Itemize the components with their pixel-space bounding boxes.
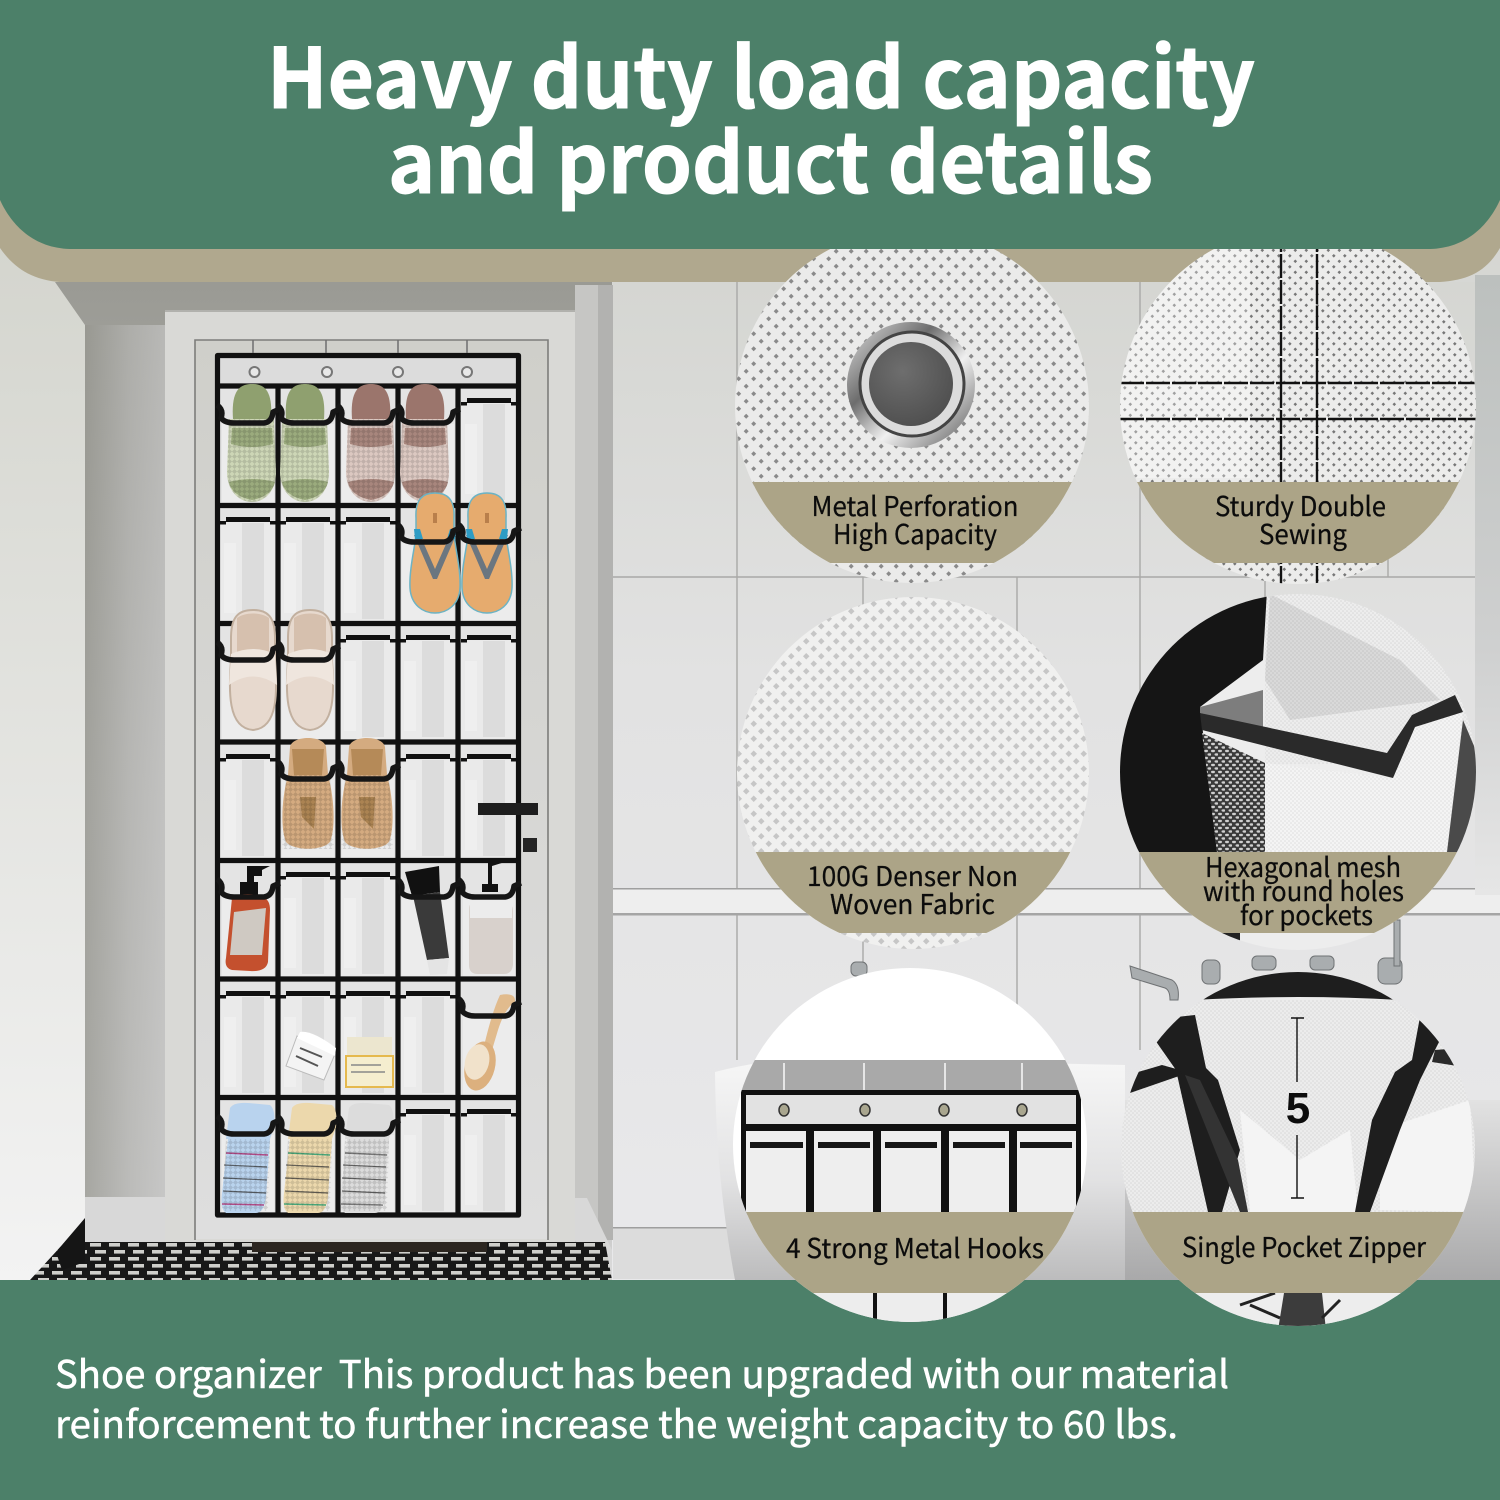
door handle and lock (478, 803, 538, 852)
wooden hair brush (459, 994, 515, 1094)
door with frame (165, 310, 575, 1242)
icon: metal eyelet (847, 322, 975, 448)
row 6 pockets (220, 981, 517, 1096)
green slippers (227, 384, 329, 502)
black top binding (1204, 972, 1394, 1000)
red pump bottle (226, 866, 270, 971)
inner mesh (1200, 690, 1263, 730)
row 7 pockets (220, 1099, 517, 1214)
dado rail (613, 888, 1500, 916)
yellow cream jar (346, 1037, 393, 1087)
mauve slippers (346, 384, 449, 502)
white pump jar (469, 862, 513, 974)
black cosmetic tube (405, 866, 449, 975)
stitch lines (1120, 228, 1480, 590)
row 5 pockets (220, 862, 517, 977)
pocket binding (1200, 695, 1463, 778)
caption band (1120, 1212, 1476, 1293)
row 3 pockets (220, 625, 517, 740)
row 4 pockets (220, 744, 517, 859)
faucet and taps (851, 920, 1402, 1000)
blue towel (222, 1103, 274, 1213)
title: and product details (388, 97, 1153, 217)
dimension marker (1286, 1018, 1310, 1198)
detail circle: non woven fabric (737, 597, 1089, 949)
baseboard right jamb (575, 1198, 612, 1280)
tile baseboard (613, 1227, 743, 1279)
tile wall (613, 282, 1500, 1280)
caption band: Woven Fabric (830, 883, 995, 922)
left straps (1155, 1015, 1240, 1212)
lower stand (1195, 1293, 1401, 1326)
detail circle: metal hooks (730, 966, 1090, 1327)
back wall (55, 282, 612, 1280)
caption band (1139, 852, 1457, 933)
detail circle: metal perforation (735, 229, 1089, 583)
caption band (735, 482, 1089, 563)
detail circle: pocket zipper (1120, 970, 1476, 1333)
title: Heavy duty load capacity (267, 12, 1255, 132)
shoe organizer (217, 340, 521, 1215)
header strip (219, 356, 518, 386)
dimension marker: 5 (1286, 1084, 1310, 1133)
top banner: green panel (0, 0, 1500, 249)
caption band (756, 852, 1070, 933)
bottom green panel (0, 1280, 1500, 1500)
frame and grid (218, 356, 518, 1215)
description text: reinforcement to further increase the weight capacity to 60 lbs. (55, 1394, 1178, 1449)
floor: black and white tile (30, 1218, 612, 1280)
detail circle: hexagonal mesh (1110, 590, 1480, 953)
hook wires (784, 1063, 1022, 1090)
caption band: Sturdy Double (1215, 485, 1386, 524)
caption band: Metal Perforation (812, 485, 1018, 524)
bath tub (715, 1057, 1125, 1280)
white center panel (1240, 1110, 1358, 1212)
yellow towel (284, 1103, 336, 1213)
woven sandals (282, 738, 393, 849)
right door jamb (575, 285, 613, 1240)
detail circle: double sewing (1120, 228, 1480, 590)
caption band: Hexagonal mesh (1205, 846, 1401, 885)
hook strings and eyelets (250, 340, 472, 377)
caption band: with round holes (1203, 870, 1404, 909)
grey towel (340, 1103, 394, 1213)
door recess shading (85, 325, 165, 1205)
baseboard left (85, 1197, 165, 1243)
lower white mesh (1266, 712, 1463, 764)
scene: bathroom background (0, 240, 1500, 1290)
caption band: 100G Denser Non (807, 855, 1018, 894)
organizer close-up (741, 1090, 1081, 1215)
left wall (0, 240, 85, 1280)
caption band: 4 Strong Metal Hooks (786, 1227, 1044, 1266)
elastic pocket bands (217, 405, 521, 1134)
title (267, 12, 1255, 217)
caption band: Single Pocket Zipper (1182, 1226, 1426, 1265)
top banner: tan band (0, 190, 1500, 282)
cork flip-flops (410, 493, 512, 613)
caption band (1120, 482, 1476, 563)
caption band: Sewing (1259, 513, 1347, 552)
caption band: for pockets (1240, 894, 1373, 933)
white cream jar (286, 1032, 336, 1080)
tile grid (613, 282, 1500, 1060)
door mat (252, 1234, 487, 1252)
caption band (730, 1212, 1090, 1293)
description text (55, 1344, 1229, 1449)
right strap (1447, 720, 1476, 852)
row 1 pockets (220, 388, 517, 503)
caption band: High Capacity (833, 513, 997, 552)
black backing (1110, 590, 1267, 852)
row 2 pockets (220, 507, 517, 622)
pockets below caption (813, 1293, 1007, 1322)
lower right tile shade (1090, 1100, 1500, 1280)
right edge wall shading (1475, 275, 1500, 895)
description text: Shoe organizer This product has been upgraded with our material (55, 1344, 1229, 1399)
beige house slippers (229, 610, 334, 730)
right straps (1355, 1017, 1440, 1212)
